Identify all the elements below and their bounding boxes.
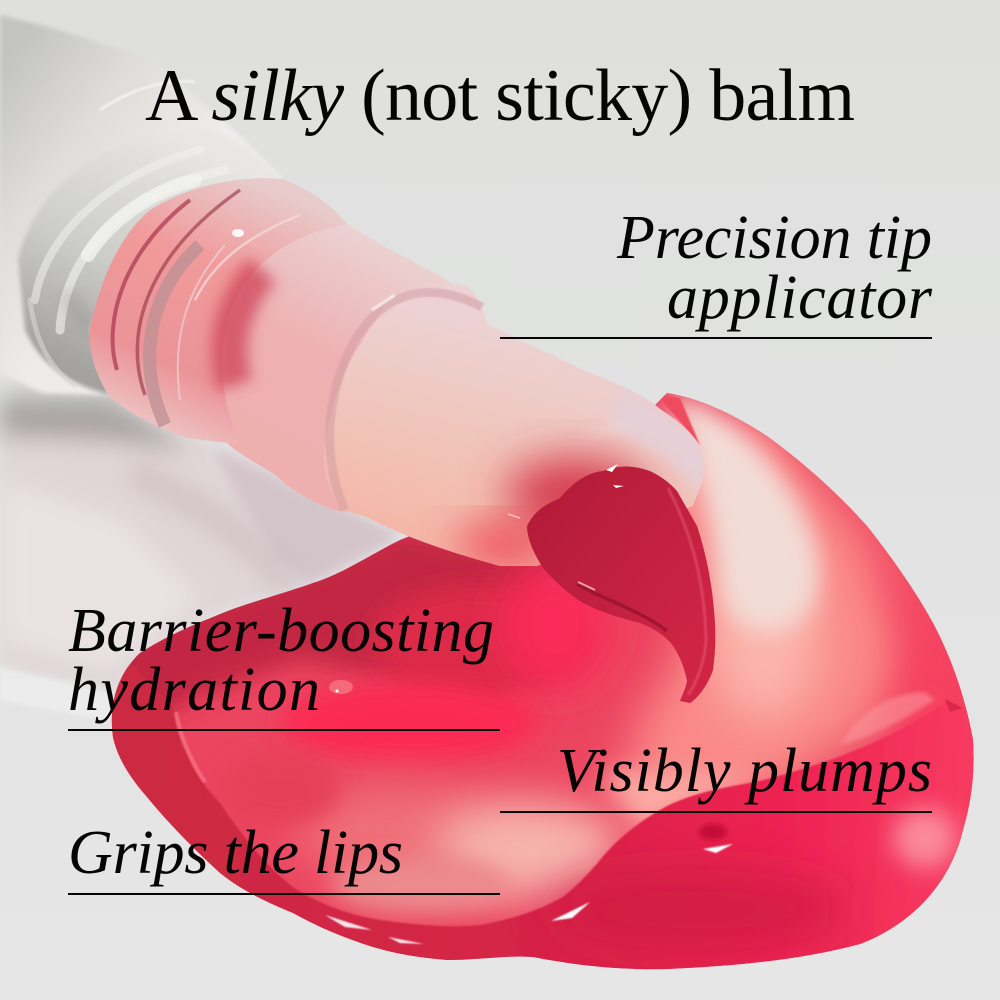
pale pool interior [290, 785, 510, 875]
pale salmon under smear [710, 560, 820, 720]
pink collar [90, 178, 347, 443]
inner pool edge highlight [176, 712, 205, 782]
red glow through tip [505, 457, 645, 533]
tube reflection on surface [0, 395, 400, 722]
callout: grips the lips: Grips the lips [68, 819, 403, 887]
callout: precision tip applicator: applicator [667, 264, 933, 332]
salmon field right of drop [620, 420, 930, 790]
crest highlight [840, 692, 935, 745]
neck thread rings [30, 150, 225, 385]
lip balm puddle [90, 380, 990, 980]
callout: barrier-boosting hydration: Barrier-boosting [68, 597, 494, 665]
dark centre lower band [550, 870, 850, 950]
droplet highlights [699, 824, 727, 840]
callout: barrier-boosting hydration [68, 597, 500, 731]
dark upper rim [112, 536, 548, 754]
threaded neck [18, 130, 283, 395]
callout: precision tip applicator: Precision tip [616, 204, 932, 272]
shoulder ring [330, 292, 482, 510]
outer glossy rim band [112, 663, 974, 970]
lip balm tube [0, 15, 710, 566]
pale smear [668, 395, 820, 633]
callout: barrier-boosting hydration: hydration [68, 656, 320, 724]
hot pink glow under tip [367, 580, 544, 692]
callout: precision tip applicator [500, 204, 933, 339]
frosted mid section [200, 215, 487, 514]
tube body [0, 15, 283, 395]
callout: visibly plumps: Visibly plumps [557, 737, 932, 805]
title: A silky (not sticky) balm [145, 55, 855, 137]
collar stripes [113, 190, 300, 425]
balm drop from tip [508, 464, 715, 703]
puddle base colour [100, 380, 980, 980]
right outer band [854, 540, 974, 758]
lilac frosted end [611, 396, 704, 494]
frosted tip [324, 284, 705, 566]
soft right highlight [893, 808, 957, 868]
